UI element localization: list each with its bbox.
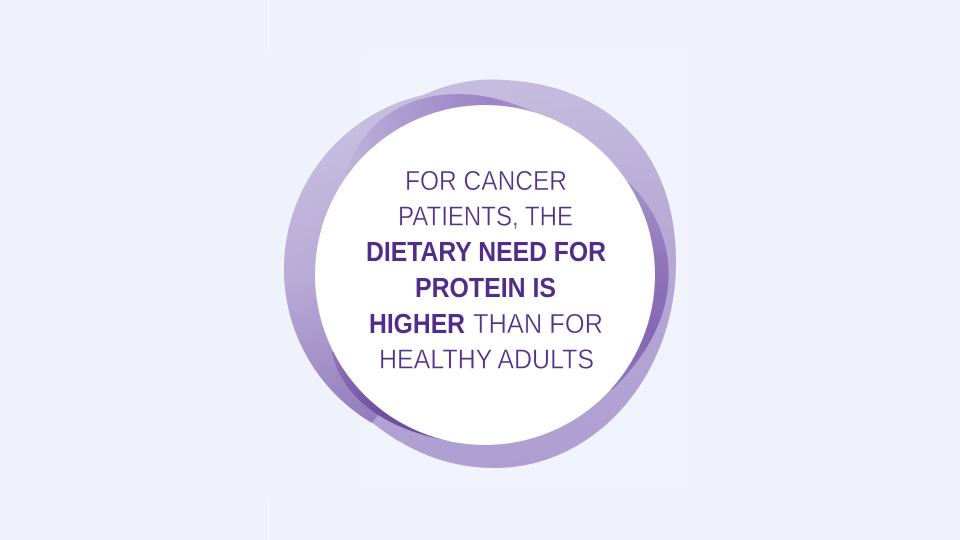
ribbon: light outer shape — [300, 80, 676, 468]
white centre circle — [315, 105, 655, 445]
ribbon: top darker band — [345, 94, 540, 275]
line 2: PATIENTS, THE — [398, 200, 573, 232]
ribbon ring — [284, 80, 676, 468]
ribbon: left band — [284, 95, 485, 423]
line 5 bold: HIGHER — [369, 308, 465, 339]
line 3: DIETARY NEED FOR — [366, 236, 606, 267]
line 6: HEALTHY ADULTS — [379, 344, 594, 374]
ribbon: right darker band — [485, 181, 669, 390]
line 1: FOR CANCER — [405, 165, 567, 196]
ribbon: lower-left dark crescent — [332, 275, 485, 445]
line 4: PROTEIN IS — [415, 272, 556, 303]
line 5 regular: THAN FOR — [473, 308, 603, 339]
statement text — [366, 165, 606, 374]
